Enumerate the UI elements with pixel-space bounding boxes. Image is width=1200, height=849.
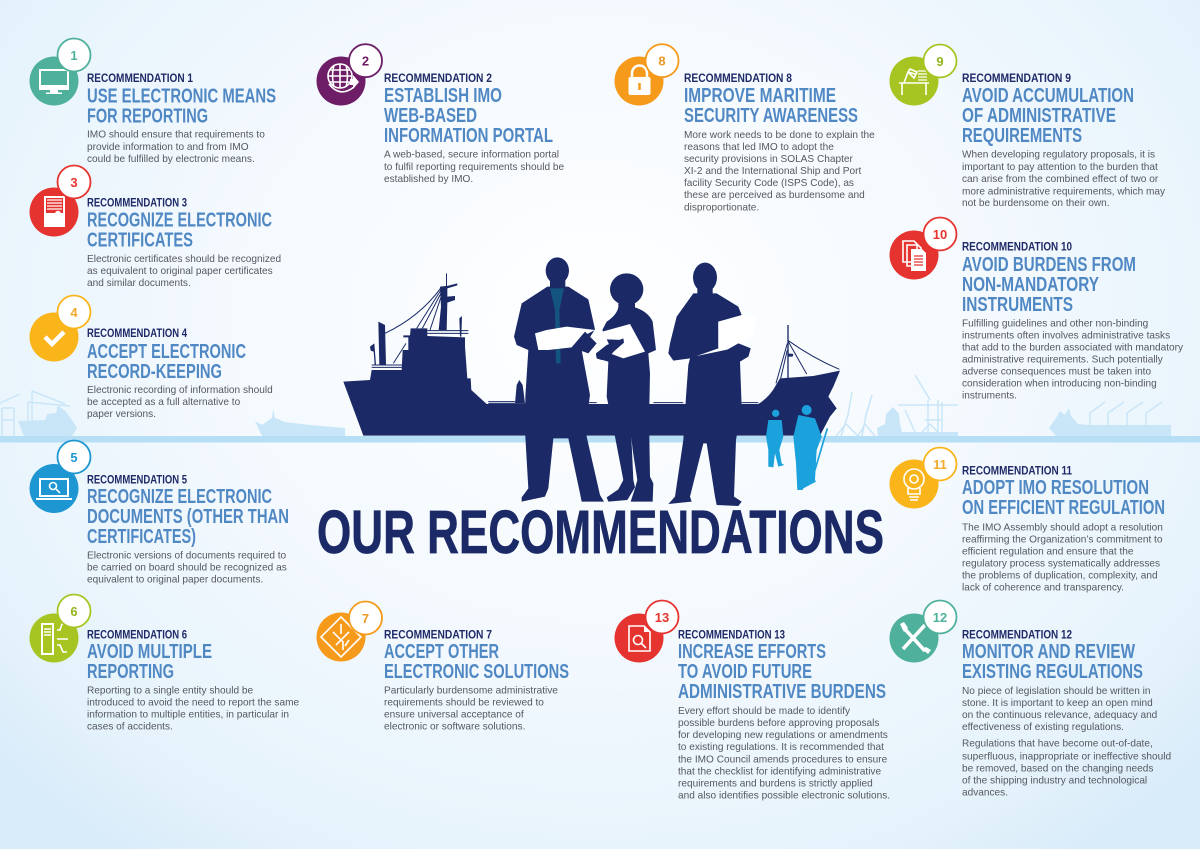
heading: NON-MANDATORY <box>962 274 1099 296</box>
body text <box>962 686 1171 798</box>
body text: electronic or software solutions. <box>384 722 525 732</box>
body text: instruments often involves administrative tasks <box>962 330 1170 342</box>
number badge 10: 10 <box>933 227 947 242</box>
ship silhouette <box>343 273 840 436</box>
body text: that add to the burden associated with mandatory <box>962 342 1184 354</box>
icon: computer monitor <box>30 56 78 106</box>
heading <box>384 641 569 683</box>
heading: EXISTING REGULATIONS <box>962 661 1143 683</box>
body text: IMO should ensure that requirements to <box>87 130 265 140</box>
number badge 1: 1 <box>70 48 78 63</box>
icon: padlock <box>614 56 664 106</box>
heading: AVOID BURDENS FROM <box>962 254 1136 276</box>
label: RECOMMENDATION 11 <box>962 466 1073 478</box>
heading: IMPROVE MARITIME <box>684 85 836 107</box>
body text: Regulations that have become out-of-date, <box>962 738 1153 750</box>
number badge 5 <box>58 440 90 474</box>
body text: The IMO Assembly should adopt a resolution <box>962 522 1163 534</box>
label: RECOMMENDATION 4 <box>87 328 187 340</box>
label: RECOMMENDATION 10 <box>962 242 1072 254</box>
body text: Every effort should be made to identify <box>678 706 851 717</box>
number badge 4 <box>58 296 90 328</box>
body text <box>87 254 281 289</box>
body text: more administrative requirements, which may <box>962 186 1166 198</box>
body text: can arise from the combined effect of two or <box>962 174 1159 185</box>
number badge 1 <box>58 38 90 72</box>
label: RECOMMENDATION 13 <box>678 630 785 642</box>
body text: and also identifies possible electronic solutions. <box>678 790 890 802</box>
panel: recommendation 3 <box>30 166 281 289</box>
heading <box>384 85 553 147</box>
body text <box>87 130 265 165</box>
number badge 7: 7 <box>362 611 369 626</box>
number badge 12 <box>924 600 956 634</box>
body text: to existing regulations. It is recommended that <box>678 742 884 753</box>
heading: AVOID MULTIPLE <box>87 641 212 663</box>
number badge 9: 9 <box>936 54 944 69</box>
heading: RECORD-KEEPING <box>87 361 222 383</box>
small worker left <box>766 410 784 467</box>
body text: important to pay attention to the burden that <box>962 162 1158 173</box>
number badge 12: 12 <box>933 610 947 625</box>
heading: INFORMATION PORTAL <box>384 125 553 147</box>
body text: facility Security Code (ISPS Code), as <box>684 178 854 189</box>
heading <box>962 254 1136 316</box>
ship and people illustration <box>343 257 840 506</box>
heading: CERTIFICATES <box>87 230 193 252</box>
label: RECOMMENDATION 3 <box>87 198 187 210</box>
body text: paper versions. <box>87 409 156 420</box>
body text: No piece of legislation should be written in <box>962 686 1151 697</box>
panel: recommendation 4 <box>30 296 273 420</box>
label: RECOMMENDATION 8 <box>684 73 793 85</box>
body text: When developing regulatory proposals, it is <box>962 150 1155 160</box>
heading <box>962 477 1165 519</box>
body text: to fulfil reporting requirements should be <box>384 162 564 173</box>
title: OUR RECOMMENDATIONS <box>317 498 884 566</box>
heading: FOR REPORTING <box>87 106 208 128</box>
heading: AVOID ACCUMULATION <box>962 85 1134 107</box>
heading: USE ELECTRONIC MEANS <box>87 86 276 108</box>
heading: CERTIFICATES) <box>87 526 196 548</box>
man with laptop <box>668 263 757 506</box>
heading: REQUIREMENTS <box>962 125 1082 147</box>
body text: possible burdens before approving proposals <box>678 718 879 729</box>
body text: and similar documents. <box>87 278 191 289</box>
label: RECOMMENDATION 2 <box>384 73 492 85</box>
heading: TO AVOID FUTURE <box>678 661 812 683</box>
body text: equivalent to original paper documents. <box>87 574 263 586</box>
body text: stone. It is important to keep an open mind <box>962 698 1153 709</box>
number badge 13: 13 <box>655 610 669 625</box>
panel: recommendation 10 <box>890 218 1184 402</box>
heading <box>87 210 272 252</box>
panel: recommendation 12 <box>890 600 1171 798</box>
heading: ELECTRONIC SOLUTIONS <box>384 661 569 683</box>
body text: these are perceived as burdensome and <box>684 190 865 201</box>
heading: ACCEPT ELECTRONIC <box>87 341 246 363</box>
label: RECOMMENDATION 5 <box>87 474 187 486</box>
body text: disproportionate. <box>684 202 759 214</box>
body text <box>384 686 558 732</box>
body text: on the continuous relevance, adequacy and <box>962 710 1157 721</box>
icon: document with magnifier <box>614 614 664 662</box>
body text <box>684 130 875 214</box>
body text: regulatory process systematically addresses <box>962 558 1160 570</box>
panel: recommendation 7 <box>316 602 569 732</box>
body text: be accepted as a full alternative to <box>87 397 241 408</box>
body text: information to multiple entities, in particular in <box>87 710 289 720</box>
body text: the problems of duplication, complexity, and <box>962 570 1158 582</box>
body text <box>384 150 564 185</box>
body text <box>962 318 1184 402</box>
body text: requirements should be reviewed to <box>384 698 544 708</box>
number badge 7 <box>349 602 382 634</box>
body text: Reporting to a single entity should be <box>87 686 253 696</box>
panel: recommendation 5 <box>30 440 289 586</box>
horizon band <box>0 436 1200 442</box>
heading: ACCEPT OTHER <box>384 641 499 663</box>
heading: RECOGNIZE ELECTRONIC <box>87 210 272 232</box>
body text: that the checklist for identifying administrative <box>678 766 881 778</box>
body text: XI-2 and the International Ship and Port <box>684 166 862 177</box>
heading: DOCUMENTS (OTHER THAN <box>87 506 289 528</box>
icon: globe with arrow <box>316 56 366 106</box>
number badge 4: 4 <box>70 305 78 320</box>
heading: OF ADMINISTRATIVE <box>962 105 1116 127</box>
heading: ADMINISTRATIVE BURDENS <box>678 681 886 703</box>
number badge 5: 5 <box>70 450 78 465</box>
icon: screen with magnifier <box>30 464 78 513</box>
heading: INSTRUMENTS <box>962 294 1073 316</box>
body text: consideration when introducing non-binding <box>962 378 1157 390</box>
body text: advances. <box>962 788 1008 798</box>
body text: effectiveness of existing regulations. <box>962 722 1124 733</box>
body text: cases of accidents. <box>87 722 173 732</box>
body text: Electronic certificates should be recognized <box>87 254 281 265</box>
icon: light bulb with gear <box>890 460 938 508</box>
number badge 8: 8 <box>658 54 666 69</box>
panel: recommendation 9 <box>890 44 1166 209</box>
heading: REPORTING <box>87 661 174 683</box>
number badge 3: 3 <box>70 175 78 190</box>
body text: not be burdensome on their own. <box>962 198 1110 209</box>
woman with tablet <box>596 273 656 502</box>
body text: instruments. <box>962 390 1017 402</box>
number badge 11 <box>924 448 956 480</box>
number badge 8 <box>646 44 678 77</box>
heading: MONITOR AND REVIEW <box>962 641 1135 663</box>
label: RECOMMENDATION 7 <box>384 630 492 642</box>
heading <box>678 641 886 703</box>
icon: circuit diamond <box>316 612 366 662</box>
label: RECOMMENDATION 12 <box>962 630 1072 642</box>
heading: ESTABLISH IMO <box>384 85 502 107</box>
body text: be carried on board should be recognized as <box>87 562 287 574</box>
body text: of the shipping industry and technological <box>962 776 1147 786</box>
body text <box>87 385 273 420</box>
icon: certificate <box>30 188 78 236</box>
panel: recommendation 1 <box>30 38 276 165</box>
body text: Electronic recording of information should <box>87 385 273 396</box>
number badge 10 <box>924 218 956 250</box>
body text: the IMO Council amends procedures to ensure <box>678 754 888 766</box>
body text: Fulfilling guidelines and other non-binding <box>962 318 1148 330</box>
body text <box>962 522 1163 594</box>
body text: be removed, based on the changing needs <box>962 764 1153 774</box>
body text: as equivalent to original paper certificates <box>87 266 273 277</box>
icon: crossed tools <box>890 614 938 662</box>
body text: for developing new regulations or amendments <box>678 730 888 741</box>
number badge 9 <box>924 44 956 78</box>
body text: lack of coherence and transparency. <box>962 582 1124 594</box>
body text: efficient regulation and ensure that the <box>962 546 1134 558</box>
body text: established by IMO. <box>384 174 473 185</box>
heading <box>962 641 1143 683</box>
body text: Electronic versions of documents required to <box>87 550 287 562</box>
heading <box>87 486 289 548</box>
panel: recommendation 8 <box>614 44 875 214</box>
number badge 13 <box>646 600 678 634</box>
body text: reaffirming the Organization’s commitment to <box>962 534 1163 546</box>
man with documents <box>514 257 604 502</box>
panel: recommendation 13 <box>614 600 890 802</box>
body text: introduced to avoid the need to report the same <box>87 698 299 708</box>
heading: RECOGNIZE ELECTRONIC <box>87 486 272 508</box>
body text: superfluous, inappropriate or ineffective should <box>962 752 1171 762</box>
heading: INCREASE EFFORTS <box>678 641 826 663</box>
icon: stacked documents <box>890 230 938 280</box>
heading <box>87 641 212 683</box>
heading: WEB-BASED <box>384 105 477 127</box>
heading: SECURITY AWARENESS <box>684 105 858 127</box>
body text: security provisions in SOLAS Chapter <box>684 154 854 165</box>
heading <box>962 85 1134 147</box>
number badge 2: 2 <box>362 54 369 69</box>
label: RECOMMENDATION 9 <box>962 73 1071 85</box>
port silhouettes background <box>0 375 1171 436</box>
body text: reasons that led IMO to adopt the <box>684 142 834 153</box>
small worker right <box>793 405 827 490</box>
body text: A web-based, secure information portal <box>384 150 559 160</box>
body text: administrative requirements. Such potentially <box>962 354 1164 366</box>
number badge 6 <box>58 594 90 628</box>
heading <box>87 341 246 383</box>
icon: server with arrows <box>30 614 78 662</box>
body text: provide information to and from IMO <box>87 142 249 153</box>
body text <box>87 686 299 732</box>
label: RECOMMENDATION 1 <box>87 73 194 85</box>
label: RECOMMENDATION 6 <box>87 630 187 642</box>
body text <box>87 550 287 586</box>
body text <box>962 150 1166 209</box>
panel: recommendation 2 <box>316 44 564 185</box>
body text: requirements and burdens is strictly applied <box>678 778 873 790</box>
body text: Particularly burdensome administrative <box>384 686 558 696</box>
number badge 2 <box>349 44 382 77</box>
number badge 3 <box>58 166 90 198</box>
icon: check mark <box>30 312 78 362</box>
body text: could be fulfilled by electronic means. <box>87 154 255 165</box>
body text: More work needs to be done to explain the <box>684 130 875 141</box>
number badge 6: 6 <box>70 604 78 619</box>
number badge 11: 11 <box>933 457 947 472</box>
body text: ensure universal acceptance of <box>384 710 524 720</box>
icon: desk with lamp and papers <box>890 56 938 106</box>
heading <box>87 86 276 128</box>
body text <box>678 706 890 802</box>
heading <box>684 85 858 127</box>
panel: recommendation 6 <box>30 594 299 732</box>
panel: recommendation 11 <box>890 448 1165 594</box>
body text: adverse consequences must be taken into <box>962 366 1151 378</box>
